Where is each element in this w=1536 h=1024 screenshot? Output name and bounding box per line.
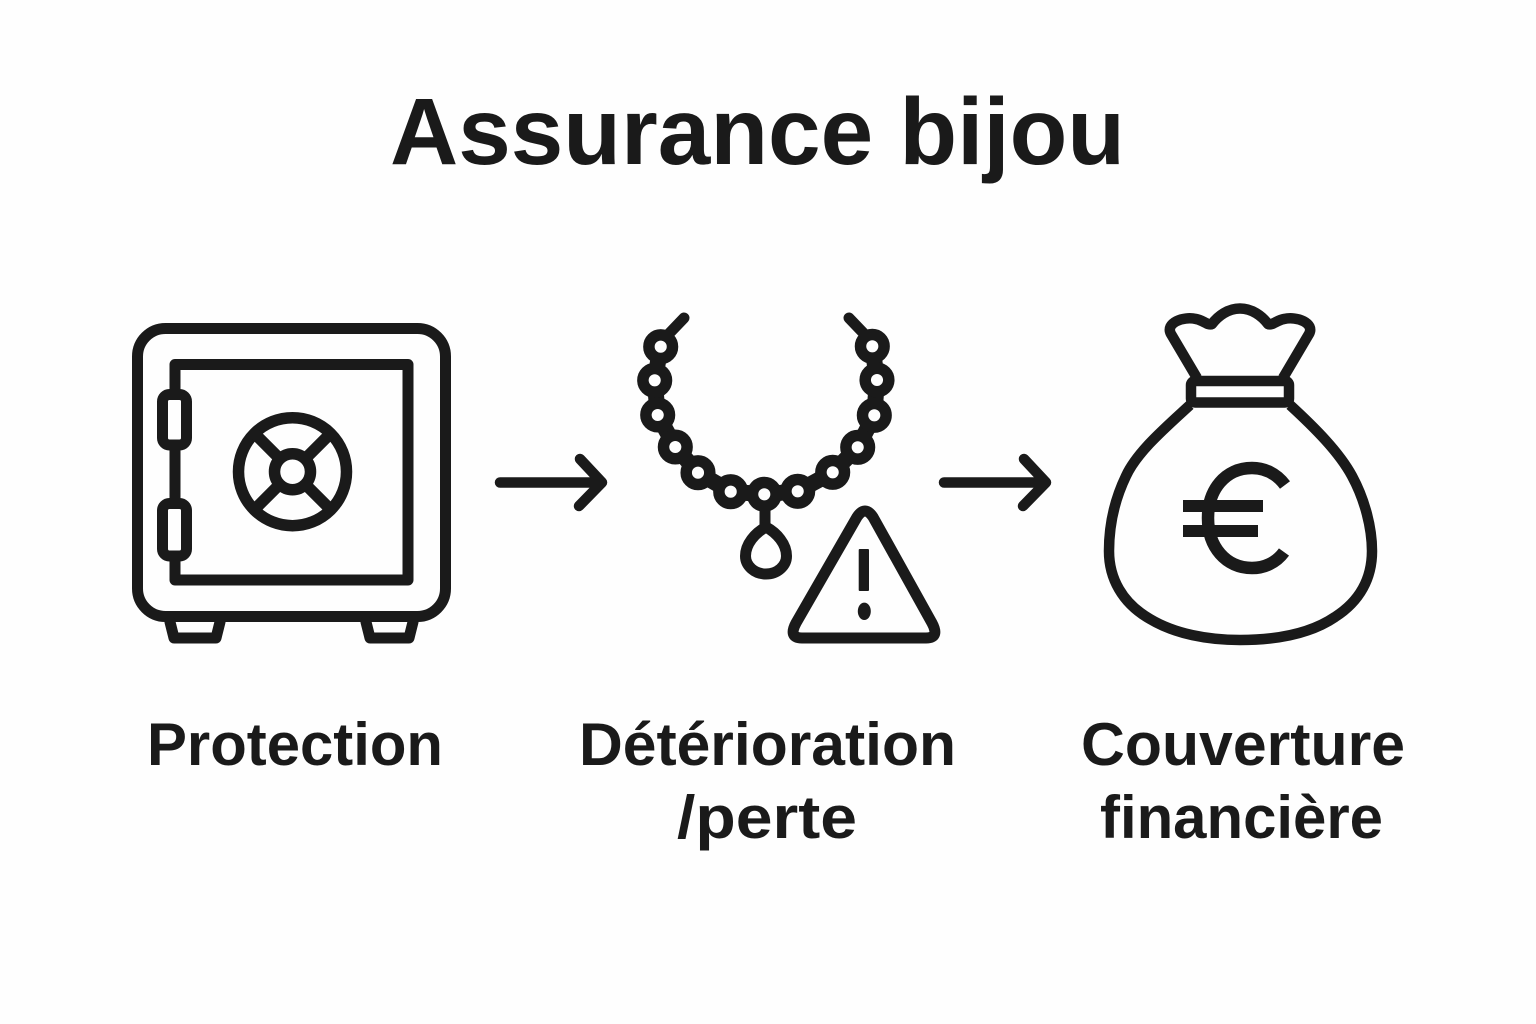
arrow: damage to coverage bbox=[944, 459, 1046, 506]
label: damage or loss: /perte bbox=[677, 784, 857, 851]
exclamation mark bbox=[858, 549, 871, 620]
icon: safe (protection) bbox=[138, 328, 446, 638]
label: financial coverage: Couverture bbox=[1081, 711, 1405, 778]
title: Assurance bijou bbox=[390, 79, 1125, 185]
bag top ruffle bbox=[1170, 308, 1310, 378]
label: damage or loss: Détérioration bbox=[579, 711, 956, 778]
label: damage or loss bbox=[579, 711, 956, 851]
lower hinge bbox=[162, 504, 186, 556]
dial bbox=[238, 418, 346, 526]
label: protection: Protection bbox=[147, 711, 443, 778]
icon: money bag with euro bbox=[1109, 308, 1372, 640]
left foot bbox=[170, 622, 220, 638]
label: financial coverage: financière bbox=[1100, 784, 1383, 851]
safe body bbox=[138, 328, 446, 616]
upper hinge bbox=[162, 394, 186, 445]
euro symbol bbox=[1183, 468, 1285, 568]
right foot bbox=[366, 622, 413, 638]
label: financial coverage bbox=[1081, 711, 1405, 851]
necklace bbox=[643, 318, 889, 574]
safe door bbox=[175, 364, 408, 580]
bag body bbox=[1109, 405, 1372, 640]
bag neck band bbox=[1191, 381, 1289, 402]
warning triangle bbox=[793, 511, 935, 638]
icon: necklace with warning bbox=[643, 318, 935, 638]
arrow: protection to damage bbox=[500, 459, 602, 506]
